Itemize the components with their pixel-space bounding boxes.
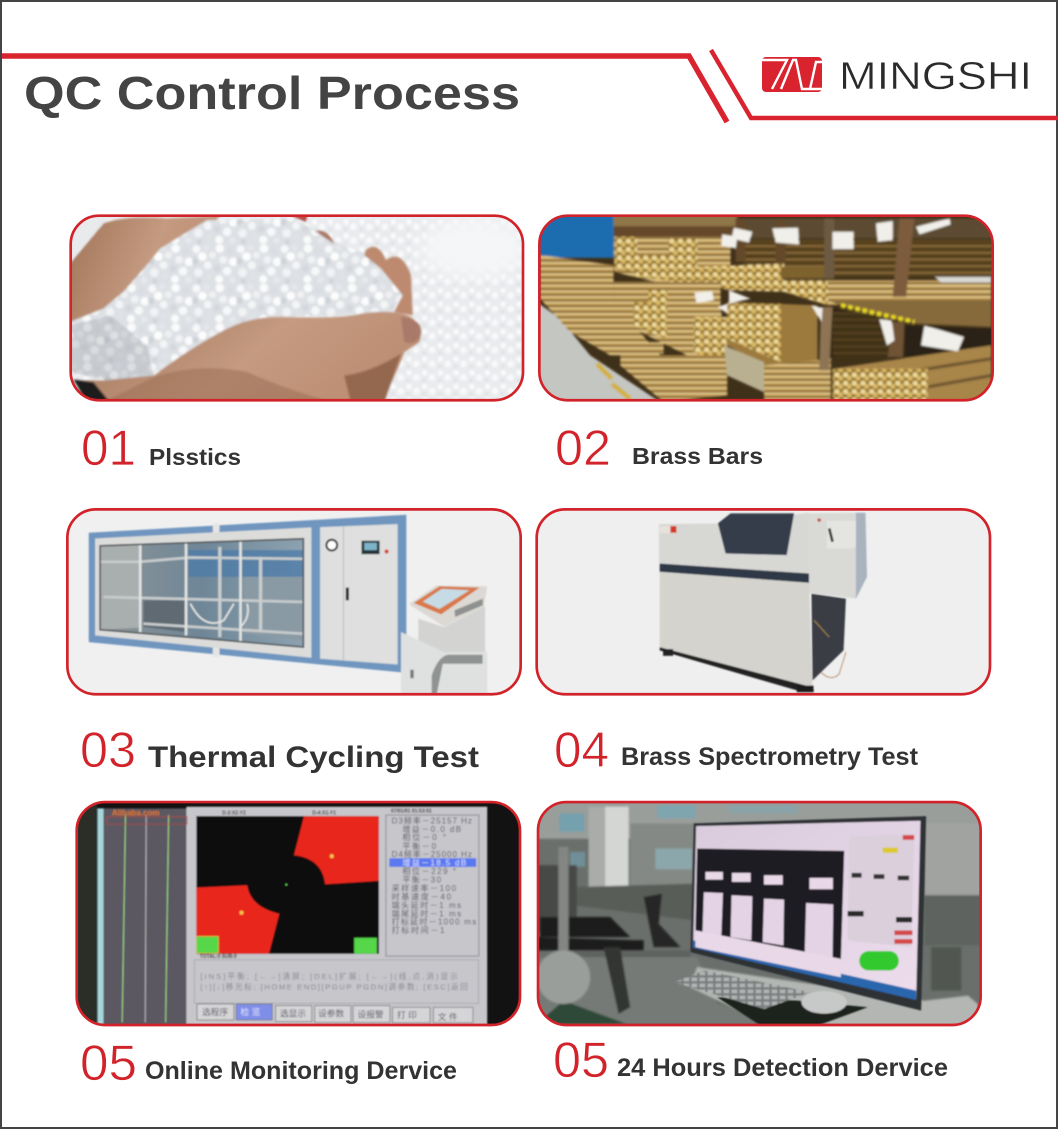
photo: flaw detector screen (78, 803, 519, 1024)
caption 04 (554, 722, 919, 778)
screen headers: D-3:X2-Y2 (222, 810, 246, 816)
panel: thermal cycling machine (66, 508, 522, 696)
parameter list: 端尾延时－1 ms (392, 908, 461, 918)
soft buttons: 检 览 (241, 1006, 261, 1017)
radar display (196, 816, 379, 954)
label Plsstics: Plsstics (149, 444, 241, 470)
label Thermal Cycling Test: Thermal Cycling Test (148, 741, 479, 774)
soft buttons: 设参数 (318, 1008, 344, 1019)
logo wordmark: MINGSHI (839, 55, 1032, 98)
caption 05 left (80, 1035, 457, 1091)
screen headers (200, 809, 432, 960)
parameter list: 平衡－0 (402, 841, 437, 851)
label Brass Spectrometry Test: Brass Spectrometry Test (621, 743, 919, 771)
panel border (71, 216, 523, 400)
caption 03 (80, 722, 479, 778)
watermark: Alibaba.com (112, 808, 159, 817)
parameter list: 时基速度－40 (392, 891, 452, 901)
number 02: 02 (555, 420, 611, 476)
parameter list: 打标时间－1 (392, 925, 445, 935)
header band (2, 50, 1058, 122)
number 05: 05 (80, 1035, 137, 1091)
panel border (538, 802, 981, 1025)
panel: brass bars (538, 214, 994, 402)
parameter list: D3频率－25157 Hz (392, 815, 472, 825)
number 05: 05 (553, 1032, 609, 1088)
parameter list: 端头延时－1 ms (392, 900, 461, 910)
photo: hands holding plastic pellets (72, 217, 522, 399)
screen headers: D-4:X1-Y1 (312, 810, 336, 816)
soft buttons: 选显示 (280, 1008, 306, 1019)
header rule right with diagonal (711, 50, 1058, 118)
photo: brass spectrometer (538, 511, 988, 693)
parameter list: 增益－18.5 dB (402, 858, 466, 868)
parameter list (389, 815, 476, 935)
soft buttons: 文 件 (438, 1011, 458, 1022)
label Brass Bars: Brass Bars (632, 443, 763, 469)
logo: Mingshi (762, 55, 1032, 98)
panel border (67, 509, 521, 694)
key help text (200, 971, 468, 992)
caption 01 (81, 420, 241, 476)
parameter list: 相位－0 ° (402, 832, 446, 842)
parameter list: 相位－229 ° (402, 866, 456, 876)
parameter list: 打标延时－1000 ms (392, 917, 476, 927)
parameter list: 平衡－30 (402, 874, 442, 884)
panel: online monitoring screen (75, 800, 522, 1026)
title: QC Control Process (24, 67, 520, 119)
number 04: 04 (554, 722, 609, 778)
number 01: 01 (81, 420, 136, 476)
soft buttons: 选程序 (202, 1006, 228, 1017)
soft buttons (197, 1004, 473, 1023)
number 03: 03 (80, 722, 136, 778)
soft buttons: 打 印 (397, 1009, 417, 1020)
panel: detection device (536, 800, 982, 1026)
key help text: [↑][↓]移光标; [HOME END][PGUP PGDN]调参数; [ESC]返回 (200, 982, 468, 992)
panel border (537, 509, 990, 694)
parameter list: D4频率－25000 Hz (392, 849, 472, 859)
label Online Monitoring Dervice: Online Monitoring Dervice (145, 1057, 457, 1085)
key help text: [INS]平衡; [←→]清屏; [DEL]扩展; [←→](线,点,消)显示 (200, 971, 458, 981)
caption 02 (555, 420, 763, 476)
screen headers: TOTAL:0 SUB:0 (200, 954, 237, 960)
parameter list: 增益－0.0 dB (402, 824, 461, 834)
caption 05 right (553, 1032, 948, 1088)
header rule left with diagonal (2, 56, 727, 122)
panel border (539, 216, 993, 400)
label 24 Hours Detection Dervice: 24 Hours Detection Dervice (617, 1054, 948, 1082)
photo: thermal cycling chamber and console (68, 511, 520, 693)
logo mark (762, 57, 822, 92)
panel: plastics (69, 214, 524, 402)
panel: spectrometer (535, 508, 992, 696)
panel border (77, 802, 520, 1025)
soft buttons: 设报警 (358, 1008, 384, 1019)
parameter list: 采样速率－100 (392, 883, 457, 893)
photo: stacks of brass bars on racks (540, 217, 992, 399)
screen headers: 07/01/01 01:53:51 (391, 809, 432, 815)
photo: factory monitor (539, 803, 980, 1024)
